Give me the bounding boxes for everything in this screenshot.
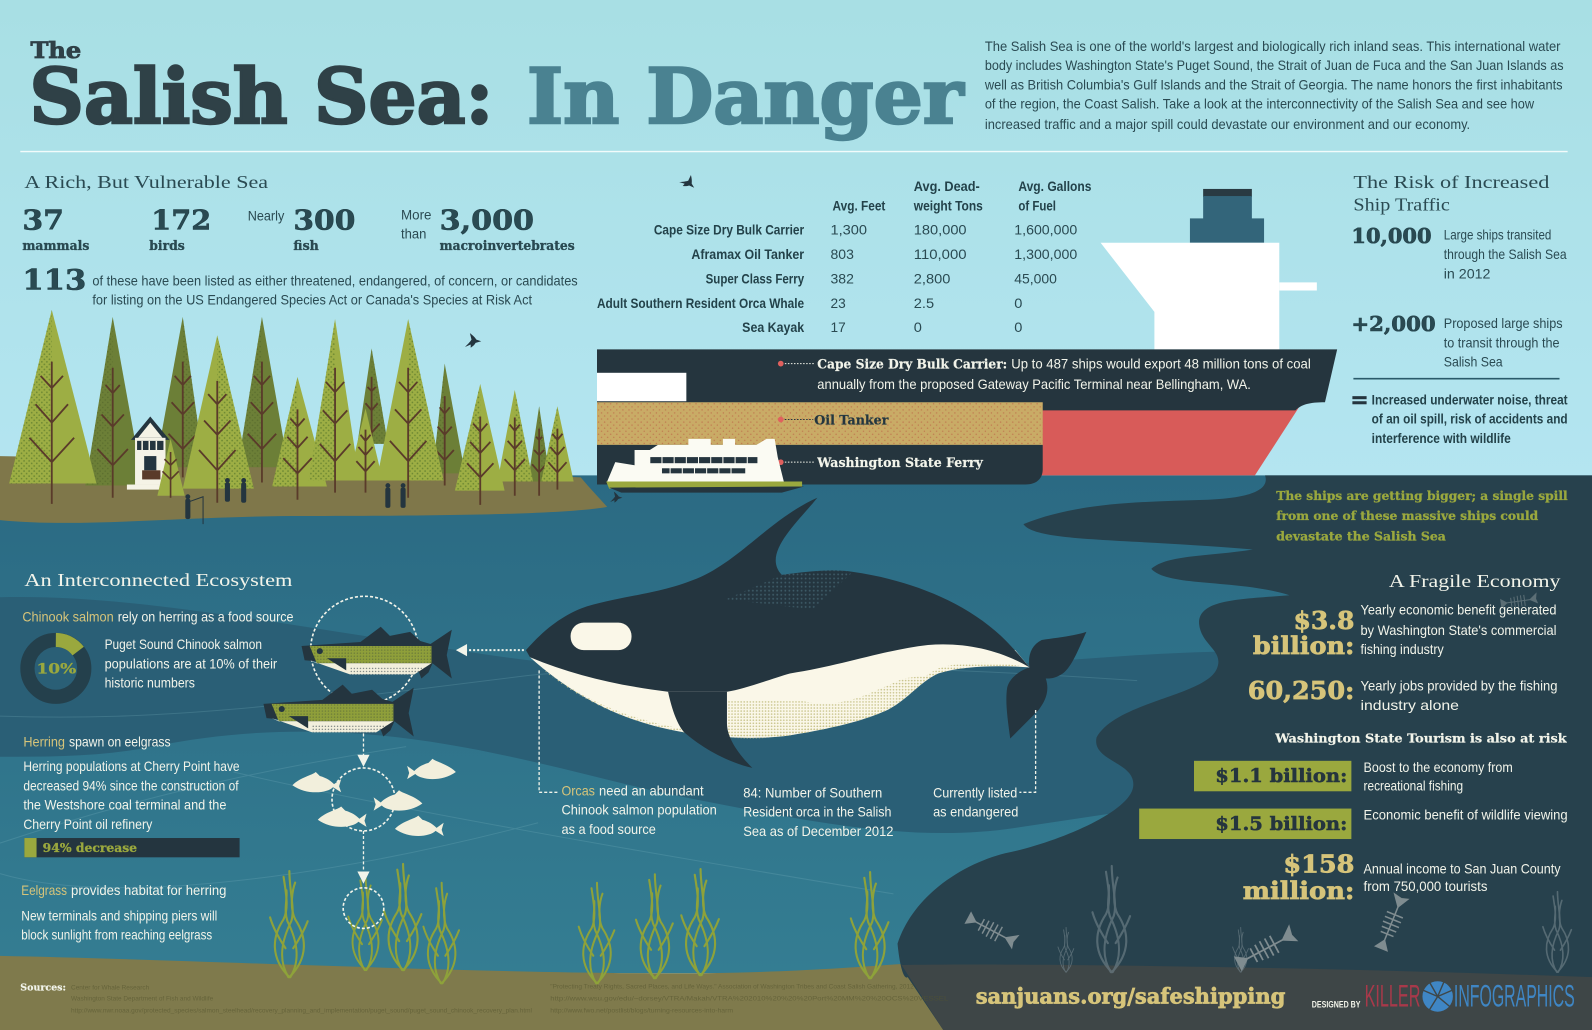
stat: 158 million: $158 bbox=[1283, 850, 1354, 879]
arrow: salmon to herring bbox=[357, 703, 370, 767]
oil spill dark region bbox=[898, 475, 1592, 1030]
callout: ferry: Washington State Ferry bbox=[816, 455, 983, 470]
stat: 158 million: from 750,000 tourists bbox=[1364, 879, 1488, 894]
stat: 3.8 billion: Yearly economic benefit generated bbox=[1361, 603, 1556, 618]
herring text: spawn on eelgrass bbox=[69, 735, 171, 750]
sea bbox=[0, 475, 1592, 973]
row: cape size: 180,000 bbox=[914, 223, 967, 238]
icon: bird near shore bbox=[610, 492, 622, 503]
whale body bbox=[526, 498, 1030, 692]
sources: "Protecting Treaty Rights, Sacred Places, and Life Ways." Association of Washington Tribes and Coast Salish Gathering, 2012 bbox=[550, 983, 914, 990]
row: ferry: 2,800 bbox=[914, 271, 951, 286]
title bbox=[29, 38, 964, 141]
endangered text: Currently listed bbox=[933, 785, 1017, 800]
row: kayak: 17 bbox=[831, 320, 846, 335]
stat: more than 3,000 macroinvertebrates: macroinvertebrates bbox=[440, 238, 575, 253]
table headers: Avg. Gallons bbox=[1018, 179, 1092, 194]
stat: 1.1 billion: recreational fishing bbox=[1364, 778, 1463, 793]
salmon population text: historic numbers bbox=[105, 676, 195, 691]
icon: shell logo bbox=[1422, 981, 1453, 1012]
salmon population text: populations are at 10% of their bbox=[105, 656, 278, 671]
stat: 1.1 billion bbox=[1194, 760, 1513, 793]
white cabin block bbox=[597, 373, 686, 401]
stat: 1.5 billion: Economic benefit of wildlife viewing bbox=[1364, 808, 1568, 823]
row: cape size: 1,300 bbox=[831, 223, 867, 238]
stat: +2,000: to transit through the bbox=[1444, 335, 1560, 350]
row: cape size: 1,600,000 bbox=[1014, 223, 1078, 238]
funnel bbox=[1190, 189, 1264, 243]
panel: fragile economy bbox=[1139, 571, 1568, 905]
intro paragraph: increased traffic and a major spill could devastate our environment and our economy. bbox=[985, 117, 1470, 132]
icon: bird over forest bbox=[465, 333, 481, 348]
arrow: herring to eelgrass bbox=[357, 831, 370, 884]
stat: 37 mammals: mammals bbox=[22, 238, 89, 253]
stat: 10,000: Large ships transited bbox=[1444, 228, 1551, 243]
herring text: the Westshore coal terminal and the bbox=[23, 798, 226, 813]
washington state ferry bbox=[606, 439, 804, 493]
stat: 3.8 billion bbox=[1253, 603, 1556, 660]
stat: 60,250 jobs bbox=[1248, 676, 1557, 713]
stat: 60,250 jobs: 60,250: bbox=[1248, 676, 1354, 705]
eelgrass text bbox=[21, 883, 226, 943]
herring text: Cherry Point oil refinery bbox=[23, 817, 152, 832]
white belly bbox=[530, 635, 1030, 738]
orcas text: as a food source bbox=[561, 822, 656, 837]
heading: An Interconnected Ecosystem bbox=[24, 570, 292, 590]
table headers bbox=[833, 179, 1092, 213]
dead eelgrass on spill bbox=[1058, 866, 1571, 972]
chinook salmon text bbox=[22, 610, 293, 625]
row: orca: 2.5 bbox=[914, 296, 934, 311]
fish skeletons bbox=[965, 593, 1537, 972]
eelgrass text: block sunlight from reaching eelgrass bbox=[21, 928, 212, 943]
stat: nearly 300 fish: 300 bbox=[293, 205, 355, 237]
superstructure bbox=[1101, 243, 1317, 349]
row: kayak: 0 bbox=[914, 320, 922, 335]
arrow: orca to salmon bbox=[456, 644, 524, 656]
orca count text: Sea as of December 2012 bbox=[743, 824, 893, 839]
pectoral fin bbox=[668, 692, 752, 768]
row: cape size: Cape Size Dry Bulk Carrier bbox=[654, 223, 805, 238]
icon: bird above table bbox=[679, 172, 699, 192]
designer credit: DESIGNED BY bbox=[1312, 1000, 1361, 1010]
herring text: Herring bbox=[23, 735, 65, 750]
table headers: of Fuel bbox=[1018, 198, 1056, 213]
background sky bbox=[0, 0, 1592, 488]
sources: http://www.wsu.gov/edu/~dorsey/VTRA/Makah/VTRA%202010%20%20%20Port%20MM%20%20OCS%20VESSEL bbox=[550, 996, 949, 1003]
stat: 3.8 billion: $3.8 bbox=[1294, 606, 1354, 635]
callout: bulk carrier: Cape Size Dry Bulk Carrier: bbox=[817, 357, 1007, 372]
stat: more than 3,000 macroinvertebrates: 3,000 bbox=[440, 205, 534, 237]
row: aframax: Aframax Oil Tanker bbox=[691, 247, 805, 262]
table headers: Avg. Dead- bbox=[914, 179, 980, 194]
dark water band bbox=[0, 597, 1320, 833]
herring text: Herring populations at Cherry Point have bbox=[23, 759, 240, 774]
stat: 113 listed species bbox=[22, 262, 578, 308]
stat: 172 birds: 172 bbox=[151, 205, 211, 237]
eelgrass beds bbox=[270, 864, 888, 983]
stat: 3.8 billion: fishing industry bbox=[1361, 642, 1444, 657]
callout: ships are getting bigger: from one of these massive ships could bbox=[1276, 509, 1539, 523]
salmon population text bbox=[105, 637, 278, 691]
circle: salmon bbox=[311, 596, 418, 704]
stat: +2,000: Proposed large ships bbox=[1444, 316, 1563, 331]
stat: nearly 300 fish: Nearly bbox=[248, 208, 284, 223]
stat: 10,000: in 2012 bbox=[1444, 266, 1490, 281]
ship comparison table bbox=[597, 179, 1092, 335]
orcas text: Chinook salmon population bbox=[561, 803, 717, 818]
table headers: Avg. Feet bbox=[833, 198, 886, 213]
stat: nearly 300 fish: fish bbox=[293, 238, 319, 253]
stat: 60,250 jobs: industry alone bbox=[1361, 698, 1459, 713]
tree in front of house bbox=[157, 439, 185, 498]
stat: nearly 300 fish bbox=[248, 205, 355, 253]
current lines bbox=[0, 666, 1137, 894]
row: ferry: 382 bbox=[831, 271, 854, 286]
stat: 113 listed species: of these have been listed as either threatened, endangered, of concern, or candidates bbox=[92, 273, 578, 288]
panel: risk of increased ship traffic bbox=[1351, 172, 1568, 446]
stat: +2,000: Salish Sea bbox=[1444, 355, 1503, 370]
row: kayak bbox=[742, 320, 1023, 335]
row: cape size bbox=[654, 223, 1078, 238]
stat: 1.1 billion: Boost to the economy from bbox=[1364, 760, 1513, 775]
title word: The: The bbox=[30, 38, 81, 64]
title: In Danger: In Danger bbox=[527, 51, 964, 141]
stat: more than 3,000 macroinvertebrates bbox=[401, 205, 575, 253]
row: orca: Adult Southern Resident Orca Whale bbox=[597, 296, 804, 311]
panel: interconnected ecosystem bbox=[21, 570, 1018, 943]
house bbox=[127, 416, 170, 490]
salmon lower bbox=[263, 685, 414, 736]
heading bbox=[1353, 172, 1549, 214]
orcas text: Orcas bbox=[561, 783, 595, 798]
stat: 37 mammals: 37 bbox=[22, 205, 64, 237]
herring text: decreased 94% since the construction of bbox=[23, 778, 239, 793]
subheading: tourism: Washington State Tourism is also at risk bbox=[1274, 732, 1567, 746]
herring school bbox=[292, 759, 456, 836]
bulk carrier dark hull bbox=[597, 349, 1337, 410]
heading: The Risk of Increased bbox=[1353, 172, 1549, 192]
stat: 3.8 billion: billion: bbox=[1253, 631, 1354, 660]
sources bbox=[20, 982, 949, 1015]
bar: 94 percent decrease bbox=[24, 838, 240, 857]
row: kayak: 0 bbox=[1014, 320, 1023, 335]
callout: ships are getting bigger bbox=[1276, 489, 1568, 543]
orca count text: Resident orca in the Salish bbox=[743, 805, 891, 820]
callout: ships are getting bigger: devastate the Salish Sea bbox=[1276, 529, 1446, 543]
circle: herring bbox=[332, 768, 395, 831]
callout: bulk carrier bbox=[778, 357, 1311, 392]
intro paragraph: of the region, the Coast Salish. Take a look at the interconnectivity of the Salish Sea and see how bbox=[985, 97, 1534, 112]
stat: 172 birds bbox=[149, 205, 211, 253]
callout: oil tanker: Oil Tanker bbox=[814, 413, 889, 428]
heading: Ship Traffic bbox=[1353, 194, 1450, 214]
seabed bbox=[0, 956, 954, 1030]
sources: http://www.fwo.net/postlist/blogs/turning-resources-into-harm bbox=[550, 1008, 734, 1015]
stat: 10,000: through the Salish Sea bbox=[1444, 247, 1567, 262]
donut chart: 10 percent bbox=[27, 640, 84, 697]
bar: 94 percent decrease: 94% decrease bbox=[43, 841, 137, 855]
row: orca: 0 bbox=[1014, 296, 1023, 311]
sources: Sources: bbox=[20, 982, 66, 993]
designer credit: KILLER bbox=[1365, 979, 1420, 1014]
sources: Center for Whale Research bbox=[71, 984, 150, 991]
chinook salmon text: rely on herring as a food source bbox=[118, 610, 293, 625]
stat: 10,000 bbox=[1351, 224, 1567, 281]
stat: 113 listed species: 113 bbox=[22, 262, 86, 296]
herring text bbox=[23, 735, 240, 832]
row: ferry bbox=[706, 271, 1057, 286]
callout: bulk carrier: Up to 487 ships would export 48 million tons of coal bbox=[1011, 357, 1311, 372]
orcas text bbox=[561, 783, 717, 837]
leader: endangered note bbox=[1019, 710, 1036, 792]
chinook salmon text: Chinook salmon bbox=[22, 610, 114, 625]
shoreline ground bbox=[0, 456, 607, 523]
callout: oil tanker bbox=[778, 413, 889, 428]
endangered text: as endangered bbox=[933, 805, 1018, 820]
tail flukes bbox=[1006, 632, 1086, 738]
leader: orcas note bbox=[539, 670, 558, 792]
stat: 1.5 billion bbox=[1139, 808, 1568, 839]
orca count text: 84: Number of Southern bbox=[743, 785, 882, 800]
row: aframax: 110,000 bbox=[914, 247, 967, 262]
row: ferry: 45,000 bbox=[1014, 271, 1057, 286]
result: equals statement: interference with wildlife bbox=[1372, 431, 1511, 446]
title: Salish Sea: Salish Sea: bbox=[29, 51, 493, 141]
intro paragraph: The Salish Sea is one of the world's largest and biologically rich inland seas. This international water bbox=[985, 39, 1561, 54]
result: equals statement bbox=[1352, 392, 1568, 446]
stat: 113 listed species: for listing on the US Endangered Species Act or Canada's Species at Risk Act bbox=[92, 293, 532, 308]
salmon upper bbox=[302, 627, 452, 679]
forest bbox=[9, 310, 574, 505]
row: aframax: 803 bbox=[831, 247, 854, 262]
designer credit bbox=[1312, 979, 1575, 1014]
eelgrass text: Eelgrass bbox=[21, 883, 67, 898]
callout: bulk carrier: annually from the proposed Gateway Pacific Terminal near Bellingham, WA. bbox=[817, 377, 1251, 392]
oil tanker band bbox=[597, 402, 1043, 446]
eye patch bbox=[571, 623, 632, 650]
stat: 1.1 billion: $1.1 billion: bbox=[1215, 766, 1347, 787]
salmon population text: Puget Sound Chinook salmon bbox=[105, 637, 262, 652]
circle: eelgrass bbox=[343, 888, 384, 928]
stat: 60,250 jobs: Yearly jobs provided by the fishing bbox=[1361, 679, 1557, 694]
body stipple bbox=[726, 570, 853, 609]
endangered text bbox=[933, 785, 1018, 820]
table headers: weight Tons bbox=[913, 198, 983, 213]
stat: more than 3,000 macroinvertebrates: than bbox=[401, 227, 426, 242]
dashed connectors bbox=[311, 596, 1036, 928]
ferry dark band bbox=[597, 445, 1043, 485]
whale bbox=[526, 498, 1086, 768]
stat: 158 million bbox=[1243, 850, 1561, 905]
eelgrass text: New terminals and shipping piers will bbox=[21, 908, 217, 923]
ship callouts bbox=[778, 357, 1311, 470]
donut chart: 10 percent: 10% bbox=[37, 661, 77, 677]
stat: 3.8 billion: by Washington State's commercial bbox=[1361, 623, 1556, 638]
intro paragraph bbox=[984, 39, 1564, 132]
row: aframax: 1,300,000 bbox=[1014, 247, 1078, 262]
stat: 10,000: 10,000 bbox=[1351, 224, 1432, 248]
row: orca: 23 bbox=[831, 296, 846, 311]
people silhouettes bbox=[185, 478, 406, 524]
stat: 158 million: million: bbox=[1243, 876, 1354, 905]
stat: 172 birds: birds bbox=[149, 238, 185, 253]
belly stipple bbox=[538, 663, 1030, 738]
stat: 37 mammals bbox=[22, 205, 89, 253]
website link: sanjuans.org/safeshipping bbox=[976, 985, 1285, 1010]
sources: Washington State Department of Fish and Wildlife bbox=[71, 996, 214, 1003]
row: aframax bbox=[691, 247, 1078, 262]
heading: A Rich, But Vulnerable Sea bbox=[24, 172, 268, 192]
ship illustration bbox=[597, 189, 1337, 485]
panel: a rich but vulnerable sea bbox=[22, 172, 578, 308]
orcas text: need an abundant bbox=[599, 783, 704, 798]
heading: A Fragile Economy bbox=[1389, 571, 1562, 591]
stat: +2,000: +2,000 bbox=[1351, 312, 1436, 336]
row: ferry: Super Class Ferry bbox=[706, 271, 804, 286]
sources: http://www.nwr.noaa.gov/protected_species/salmon_steelhead/recovery_planning_and_implementation/puget_sound/puget_sound_chinook_recovery_plan.html bbox=[71, 1008, 533, 1015]
stat: more than 3,000 macroinvertebrates: More bbox=[401, 207, 432, 222]
result: equals statement: Increased underwater noise, threat bbox=[1372, 392, 1568, 407]
spill seabed bbox=[902, 964, 1592, 1030]
intro paragraph: well as British Columbia's Gulf Islands and the Strait of Georgia. The name honors the first inhabitants bbox=[984, 77, 1563, 92]
row: orca bbox=[597, 296, 1023, 311]
stat: 1.5 billion: $1.5 billion: bbox=[1215, 814, 1347, 835]
row: kayak: Sea Kayak bbox=[742, 320, 804, 335]
stat: 158 million: Annual income to San Juan County bbox=[1364, 862, 1561, 877]
stat: +2,000 bbox=[1351, 312, 1563, 370]
red hull bbox=[1036, 406, 1300, 475]
callout: ships are getting bigger: The ships are getting bigger; a single spill bbox=[1276, 489, 1568, 503]
orca count text bbox=[743, 785, 893, 839]
eelgrass text: provides habitat for herring bbox=[71, 883, 226, 898]
